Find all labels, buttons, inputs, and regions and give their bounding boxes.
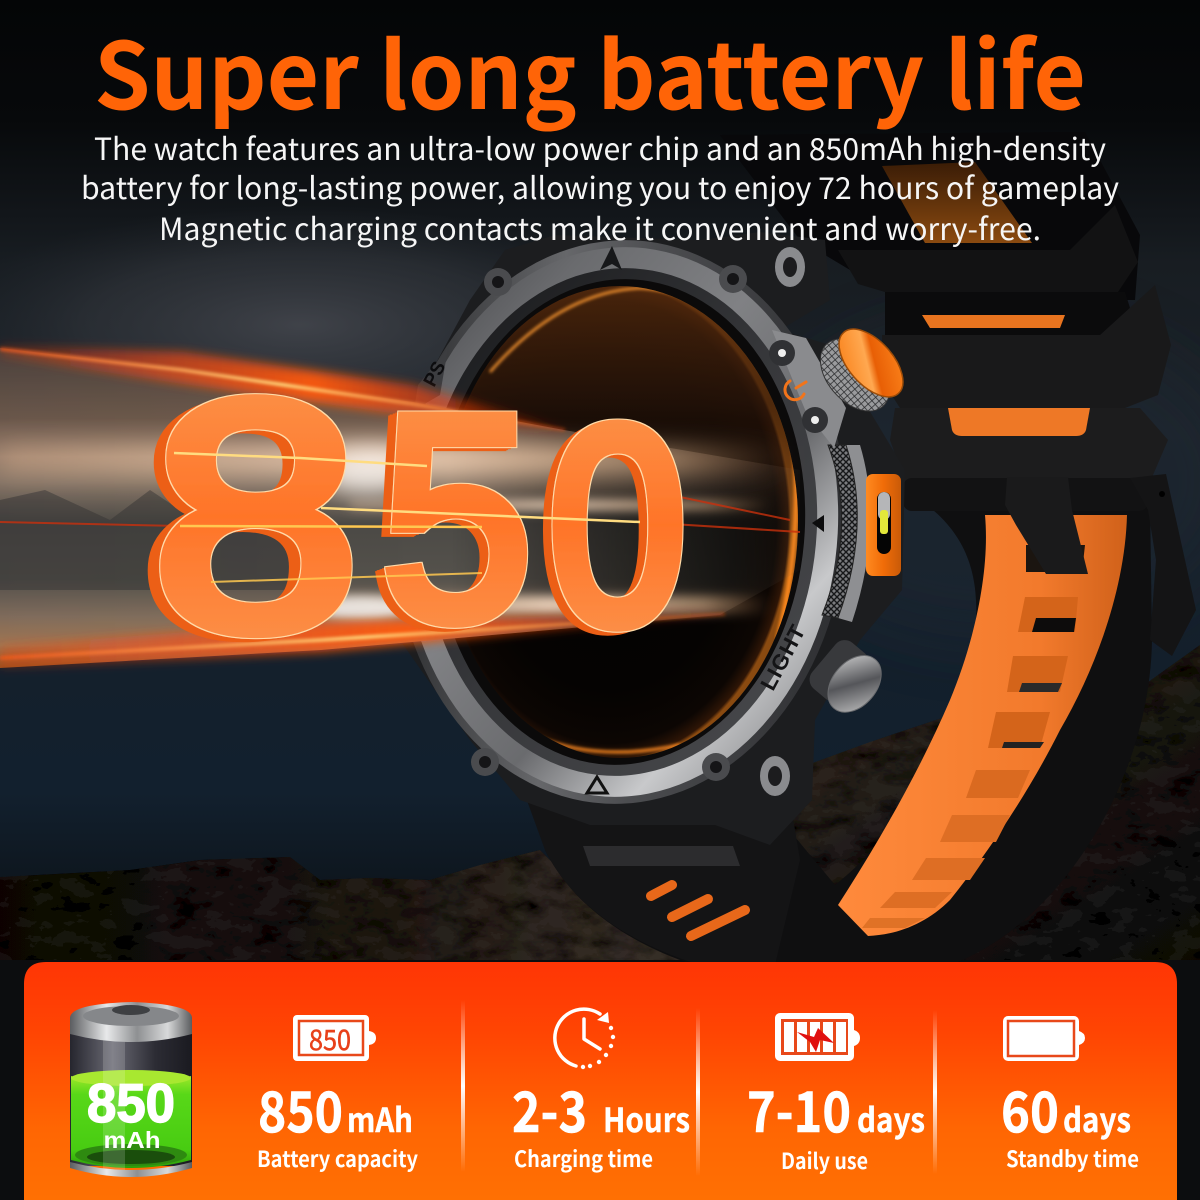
subtitle paragraph: The watch features an ultra-low power chip and an 850mAh high-density xyxy=(94,125,1106,169)
bezel markings xyxy=(414,246,915,796)
silver crown shoulder xyxy=(772,330,846,448)
orange side button xyxy=(866,474,901,576)
icon: triangle marker xyxy=(812,515,824,532)
stat: charging time: Hours xyxy=(603,1094,690,1142)
watch case xyxy=(380,229,905,845)
stat: charging time: Charging time xyxy=(514,1142,653,1174)
stat: charging time xyxy=(512,1009,690,1174)
GPS tab with label xyxy=(414,348,450,410)
subtitle paragraph: Magnetic charging contacts make it convenient and worry-free. xyxy=(159,205,1041,249)
icon: arrow logo at 12 o'clock xyxy=(600,246,622,270)
icon: charging battery with bars and bolt xyxy=(775,1013,860,1061)
icon: 3D green battery 850 mAh: mAh xyxy=(104,1127,160,1153)
stat: daily use xyxy=(747,1013,925,1176)
subtitle paragraph xyxy=(81,125,1119,249)
panel: battery stats xyxy=(24,962,1177,1200)
icon: full battery xyxy=(1003,1016,1085,1061)
beam: soft peach light bands xyxy=(0,446,790,620)
icon: small bezel screws xyxy=(471,265,828,781)
icon: crown with orange cap xyxy=(807,318,915,424)
stat: standby time xyxy=(1001,1016,1139,1174)
bezel rings xyxy=(380,229,860,815)
icon: triangle at 6 o'clock xyxy=(587,777,607,793)
streaks over the number xyxy=(174,453,640,582)
beam: top flare xyxy=(0,346,570,432)
icon: 3D green battery 850 mAh xyxy=(70,1002,192,1177)
watch screen with orange rim glow xyxy=(442,286,798,758)
stat: battery capacity: mAh xyxy=(347,1094,413,1142)
stat: charging time: 2-3 xyxy=(512,1068,587,1149)
icon: power symbol xyxy=(785,381,806,400)
side metal strip xyxy=(838,445,870,622)
icon: battery labelled 850 xyxy=(293,1015,376,1061)
watch strap: upper band and keepers xyxy=(720,132,1171,482)
stat: daily use: Daily use xyxy=(781,1144,868,1176)
icon: large hex screws xyxy=(760,247,805,796)
watch strap: orange silicone inner band xyxy=(838,515,1127,936)
title: Super long battery life xyxy=(94,3,1086,136)
stat: standby time: 60 xyxy=(1001,1068,1059,1149)
beam: opaque base fading over the screen xyxy=(0,348,800,668)
subtitle paragraph: battery for long-lasting power, allowing you to enjoy 72 hours of gameplay xyxy=(81,164,1119,208)
watch buckle: bar, tab and lever xyxy=(903,474,1196,656)
stat: standby time: days xyxy=(1063,1094,1131,1142)
stat: standby time: Standby time xyxy=(1006,1142,1139,1174)
stat: daily use: 7-10 xyxy=(747,1068,851,1149)
icon: battery labelled 850: 850 xyxy=(309,1019,351,1059)
big orange 3D number 850: 0 xyxy=(549,368,686,681)
big orange 3D number 850 xyxy=(152,335,686,698)
icon: lower metal push button xyxy=(803,634,892,723)
dividers xyxy=(461,1000,937,1176)
icon: clock with dotted arc xyxy=(555,1009,615,1069)
icon: 3D green battery 850 mAh: 850 xyxy=(87,1072,175,1134)
stat: battery capacity: Battery capacity xyxy=(257,1142,418,1174)
beam: bottom flare xyxy=(0,612,730,668)
stat: battery capacity: 850 xyxy=(258,1068,343,1149)
housing and lugs xyxy=(400,232,905,845)
big orange 3D number 850: 8 xyxy=(152,335,360,698)
watch lower strap with orange vents xyxy=(525,795,800,965)
label: LIGHT: LIGHT xyxy=(755,620,811,694)
beam: red streaks over the screen xyxy=(0,497,800,532)
watch strap: black outer loop xyxy=(545,490,1152,965)
energy beam behind the number xyxy=(0,346,800,668)
GPS tab with label: PS xyxy=(420,358,450,390)
stat: daily use: days xyxy=(857,1094,925,1142)
stat: battery capacity xyxy=(257,1015,418,1174)
big orange 3D number 850: 5 xyxy=(382,356,532,680)
knurled side panel xyxy=(822,445,857,618)
